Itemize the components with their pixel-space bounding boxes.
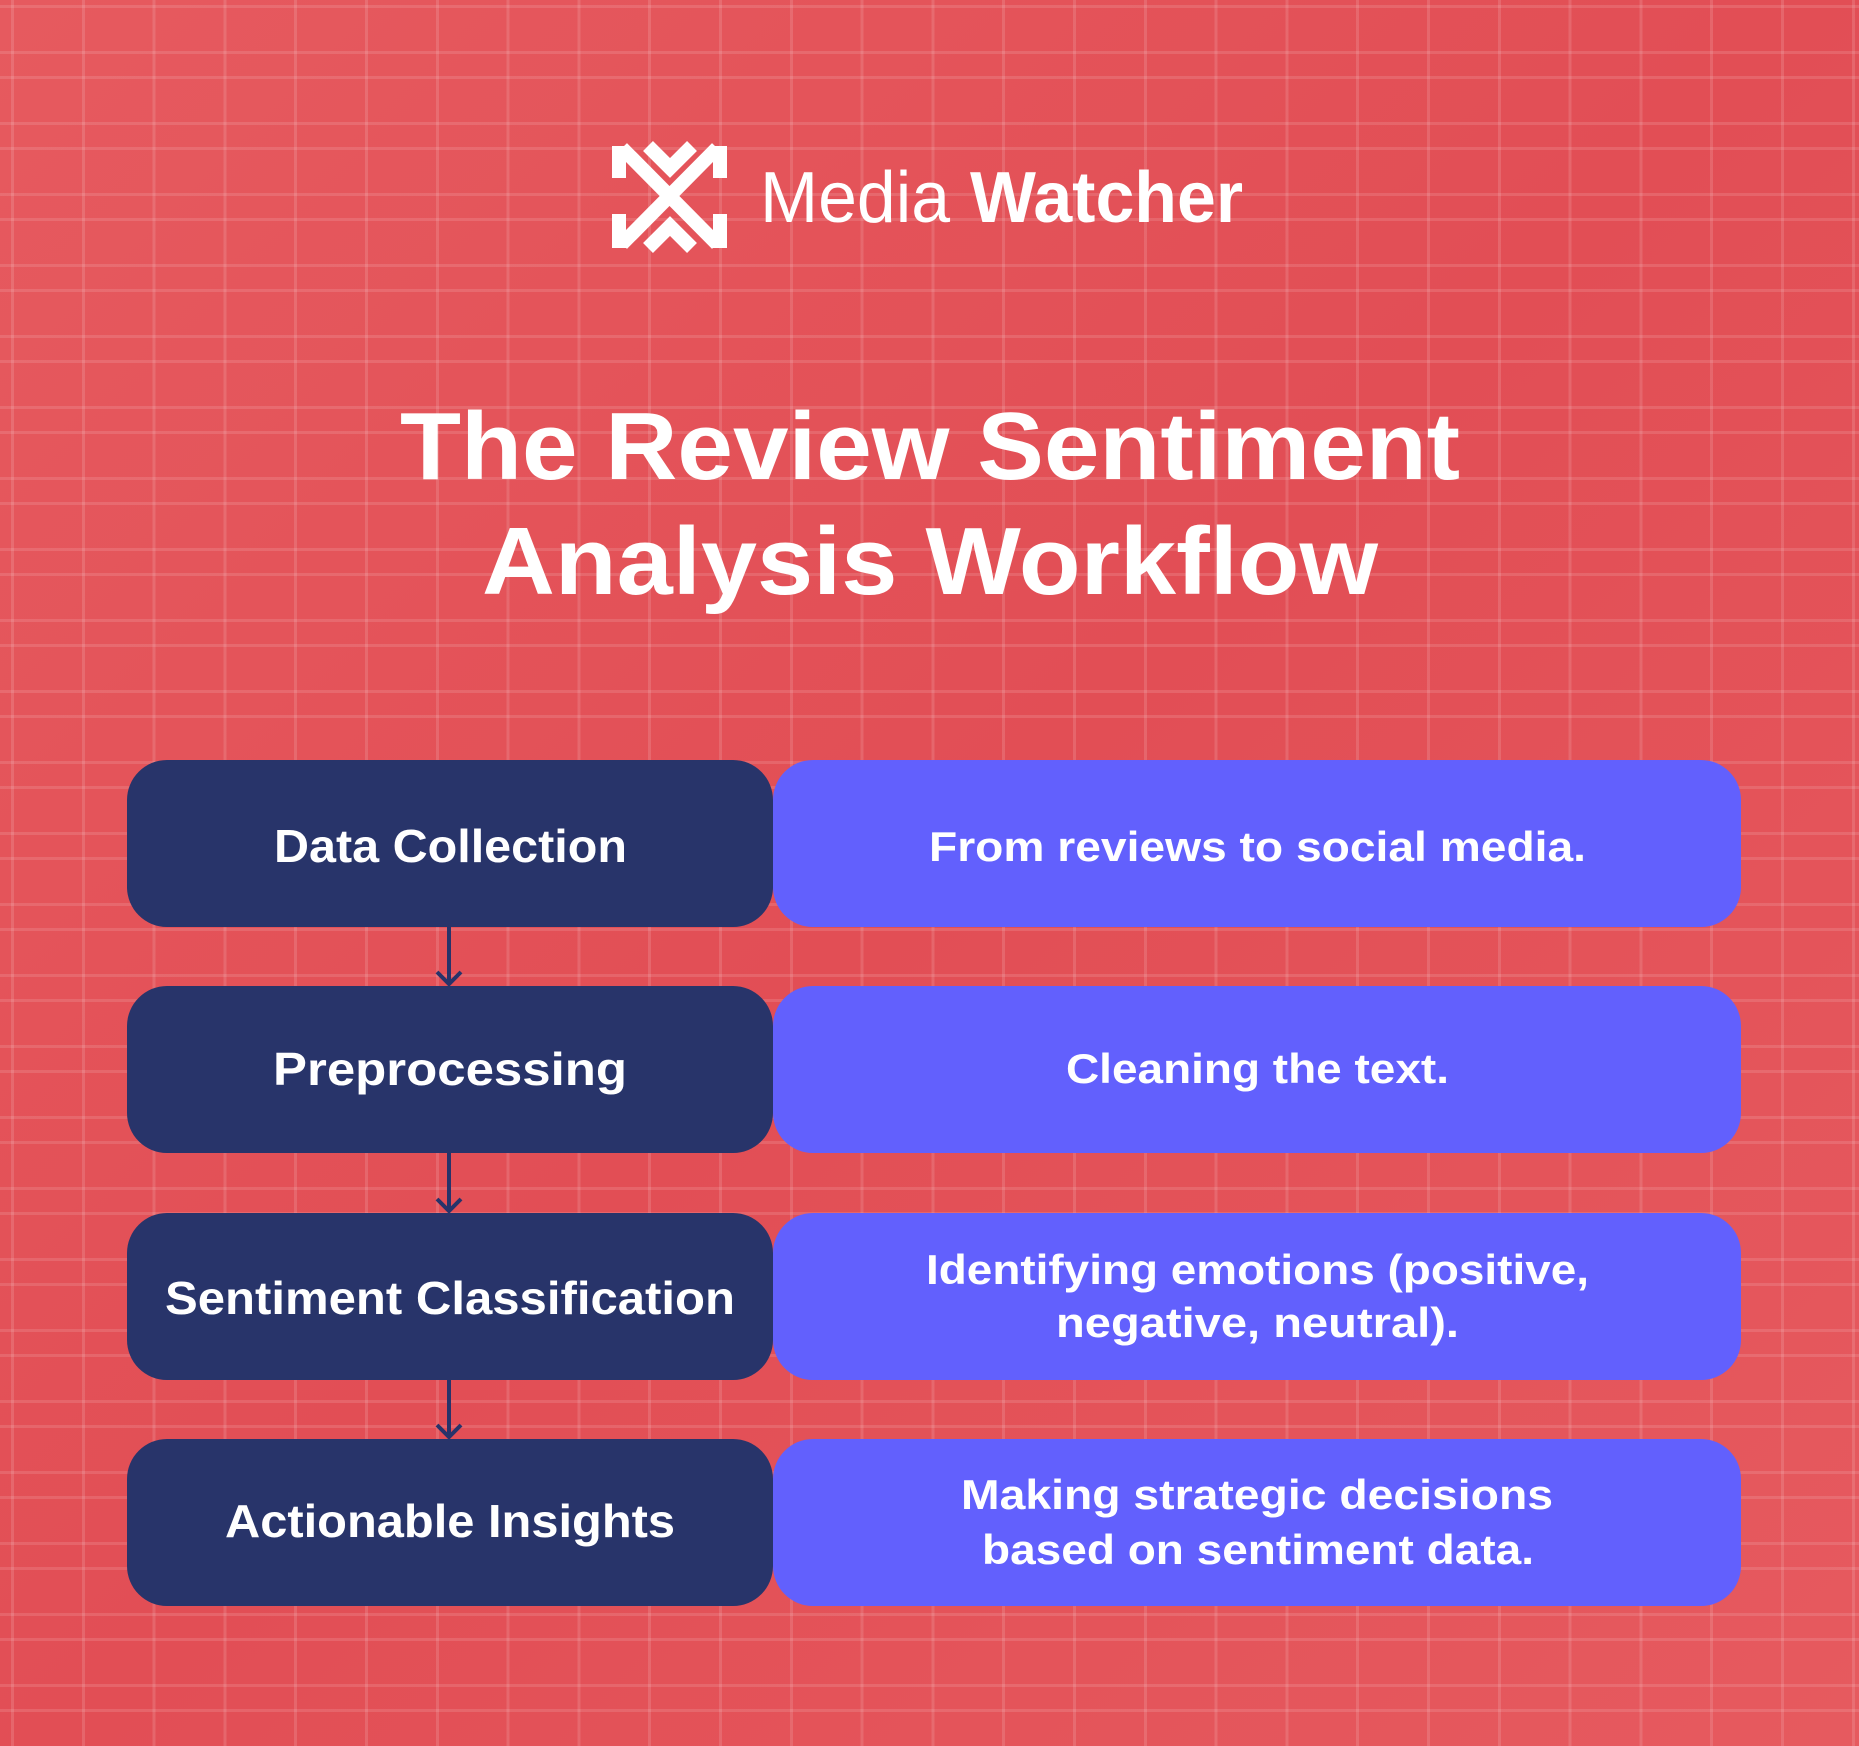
- row 4: actionable insights: [127, 1439, 1741, 1606]
- row 2: preprocessing: [127, 986, 1741, 1153]
- row 2: preprocessing: Preprocessing: [273, 1043, 627, 1095]
- arrows: [437, 927, 461, 1437]
- row 1: data collection: Data Collection: [274, 820, 627, 872]
- row 1: data collection: [127, 760, 1741, 927]
- row 1: data collection: From reviews to social media.: [929, 823, 1586, 870]
- row 3: sentiment classification: Sentiment Classification: [165, 1272, 735, 1324]
- row 3: sentiment classification: Identifying emotions (positive,: [926, 1246, 1589, 1293]
- row 4: actionable insights: Making strategic decisions: [961, 1471, 1553, 1518]
- logo icon: [619, 146, 720, 248]
- title: The Review Sentiment: [400, 393, 1460, 500]
- brand name: Watcher: [970, 158, 1243, 238]
- title: Analysis Workflow: [482, 508, 1378, 615]
- row 4: actionable insights: Actionable Insights: [225, 1495, 675, 1547]
- title: [400, 393, 1460, 615]
- brand name: Media: [760, 158, 951, 238]
- row 4: actionable insights: based on sentiment data.: [982, 1526, 1534, 1573]
- brand name: [760, 158, 1243, 238]
- row 3: sentiment classification: negative, neutral).: [1056, 1299, 1459, 1346]
- row 2: preprocessing: Cleaning the text.: [1066, 1045, 1449, 1092]
- row 3: sentiment classification: [127, 1213, 1741, 1380]
